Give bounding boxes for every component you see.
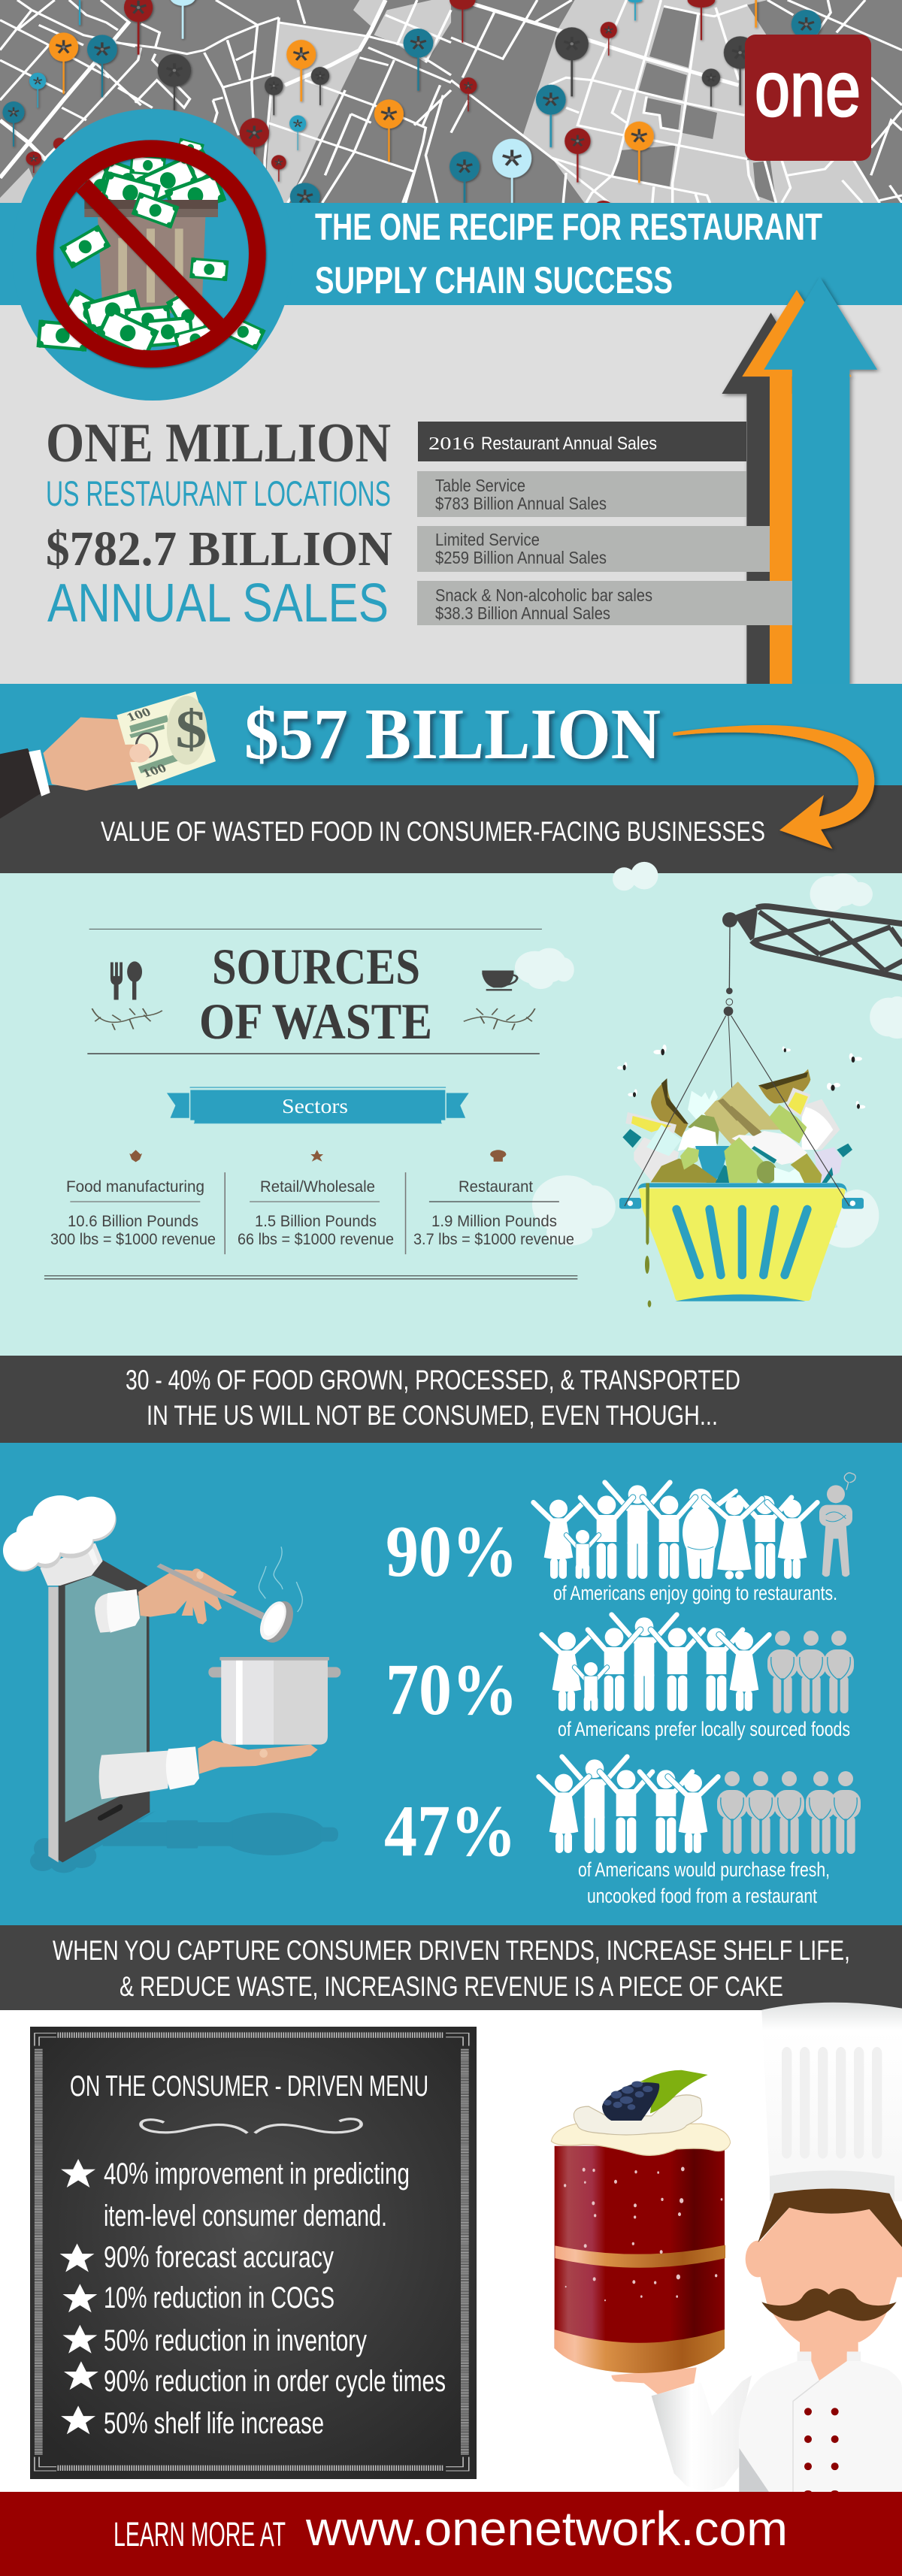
table: sales header: 2016 — [428, 434, 474, 454]
menu list: 90% reduction in order cycle times — [104, 2365, 446, 2398]
column: restaurant — [413, 1178, 574, 1248]
table row: limited service: $259 Billion Annual Sales — [435, 548, 607, 567]
stat: locations: US RESTAURANT LOCATIONS — [46, 473, 391, 513]
table: sales header: Restaurant Annual Sales — [481, 434, 657, 454]
logo: ONE: one — [755, 46, 861, 133]
footer — [0, 2492, 902, 2576]
heading: $57 billion: $57 BILLION — [244, 694, 661, 774]
stat: 70%: 70% — [386, 1649, 518, 1731]
arrows: growth arrows — [722, 277, 877, 690]
column: restaurant: Restaurant — [459, 1178, 533, 1196]
column: retail wholesale: Retail/Wholesale — [260, 1178, 375, 1196]
icon: hand with dollar bill: $ — [175, 700, 207, 760]
icon: fork and spoon — [110, 961, 142, 999]
column: food manufacturing — [50, 1178, 216, 1248]
title line 2: SUPPLY CHAIN SUCCESS — [315, 259, 673, 301]
menu list: 90% forecast accuracy — [104, 2241, 334, 2274]
icon: hand with dollar bill: 100 — [140, 761, 169, 781]
panel: consumer statistics — [0, 1443, 902, 1925]
street map left — [0, 0, 451, 210]
column: food manufacturing: 10.6 Billion Pounds — [68, 1213, 198, 1230]
icon: coffee cup — [482, 970, 517, 990]
banner: sectors: Sectors — [282, 1095, 348, 1117]
menu list: 50% shelf life increase — [104, 2407, 324, 2440]
menu list — [104, 2157, 446, 2440]
panel: header map — [0, 0, 902, 210]
caption: 47%: uncooked food from a restaurant — [587, 1885, 817, 1907]
footer url: www.onenetwork.com — [305, 2502, 788, 2556]
icon: branch right — [464, 1008, 535, 1030]
arrow: curved orange — [673, 725, 874, 849]
stat: 90%: 90% — [386, 1511, 518, 1592]
caption: 47% — [578, 1858, 830, 1907]
heading: of waste: OF WASTE — [199, 993, 432, 1050]
basket — [619, 1016, 864, 1308]
stat: one million: ONE MILLION — [46, 413, 391, 474]
column: retail wholesale: 1.5 Billion Pounds — [255, 1213, 377, 1230]
banner: sectors — [167, 1087, 469, 1123]
pile of waste — [622, 1069, 852, 1184]
flies — [617, 1045, 865, 1109]
cake — [551, 2070, 731, 2373]
panel: restaurant stats — [46, 413, 792, 633]
street map right — [449, 0, 902, 207]
menu list: 10% reduction in COGS — [104, 2281, 334, 2314]
icon: hand with dollar bill: 100 — [124, 706, 153, 724]
menu list: 40% improvement in predicting — [104, 2157, 410, 2191]
table row: limited service: Limited Service — [435, 530, 540, 549]
chalkboard — [30, 2027, 477, 2479]
table row: snack: $38.3 Billion Annual Sales — [435, 603, 610, 623]
stat: annual sales: ANNUAL SALES — [47, 573, 389, 633]
icon: crane with waste basket — [617, 906, 902, 1308]
table row: table service — [417, 471, 746, 517]
panel: white menu section — [0, 2003, 902, 2494]
table row: table service: $783 Billion Annual Sales — [435, 494, 607, 513]
crane arm — [722, 906, 902, 1088]
table row: limited service — [417, 526, 770, 572]
logo: ONE — [745, 35, 871, 161]
caption: 47%: of Americans would purchase fresh, — [578, 1858, 830, 1881]
stars — [60, 2159, 98, 2434]
menu list: item-level consumer demand. — [104, 2200, 387, 2233]
band: 30-40% of food — [0, 1356, 902, 1443]
icon: sector star — [310, 1150, 323, 1162]
rules — [44, 929, 577, 1279]
icon: hand with dollar bill — [0, 691, 216, 818]
panel: title band and stats background — [0, 203, 902, 684]
footer label: LEARN MORE AT — [114, 2515, 286, 2553]
column: restaurant: 3.7 lbs = $1000 revenue — [413, 1231, 574, 1248]
dividers — [70, 1172, 559, 1254]
icon: sector leaf — [129, 1150, 142, 1162]
illustration: chef in phone — [3, 1495, 341, 1873]
people: 90% — [534, 1473, 855, 1580]
column: restaurant: 1.9 Million Pounds — [431, 1213, 557, 1230]
column: retail wholesale: 66 lbs = $1000 revenue — [238, 1231, 394, 1248]
table row: snack — [417, 581, 792, 625]
icon: sector chef hat — [490, 1150, 506, 1162]
table row: snack: Snack & Non-alcoholic bar sales — [435, 585, 652, 605]
table: sales header — [418, 422, 746, 461]
menu list: 50% reduction in inventory — [104, 2324, 367, 2357]
stat: billion: $782.7 BILLION — [46, 522, 392, 576]
table row: table service: Table Service — [435, 476, 525, 495]
people: 70% — [542, 1615, 854, 1713]
panel: $57 billion — [0, 684, 902, 873]
column: food manufacturing: Food manufacturing — [66, 1178, 204, 1196]
board title: ON THE CONSUMER - DRIVEN MENU — [70, 2070, 428, 2103]
column: food manufacturing: 300 lbs = $1000 revenue — [50, 1231, 216, 1248]
illustration: chef with cake — [551, 2003, 902, 2494]
people: 47% — [539, 1757, 861, 1854]
icon: branch left — [92, 1008, 162, 1030]
chef body — [611, 2337, 902, 2494]
column: retail wholesale — [238, 1178, 394, 1248]
map pins left — [2, 0, 433, 210]
band: piece of cake — [0, 1925, 902, 2010]
map pins right — [449, 0, 822, 207]
panel: sources of waste — [0, 862, 902, 1356]
heading: sources: SOURCES — [212, 938, 420, 995]
icon: prohibited money trash can — [12, 109, 293, 401]
band text line 2: IN THE US WILL NOT BE CONSUMED, EVEN THOUGH... — [147, 1400, 718, 1431]
stat: 47%: 47% — [384, 1791, 516, 1872]
chef hat — [761, 2003, 902, 2201]
chef face — [746, 2189, 902, 2342]
